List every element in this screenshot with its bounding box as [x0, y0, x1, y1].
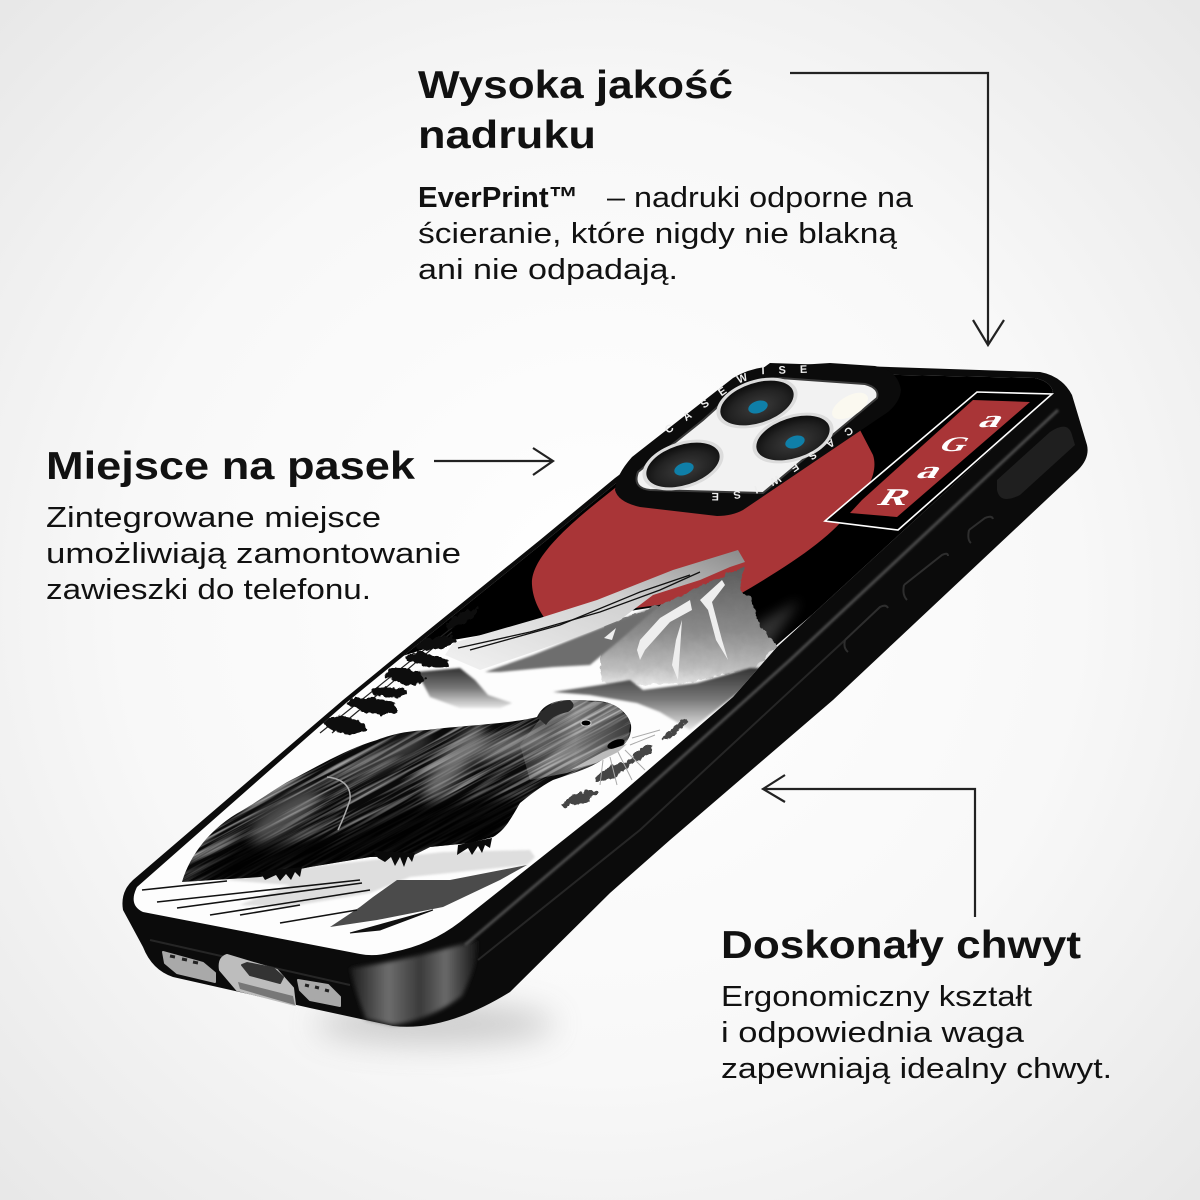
- body text: ścieranie, które nigdy nie blakną: [418, 218, 898, 250]
- heading: Miejsce na pasek: [46, 445, 415, 488]
- side highlight: [465, 410, 1058, 945]
- arrow: to strap slot: [434, 448, 553, 475]
- far hill right: [553, 668, 770, 730]
- ridge cracks: [458, 572, 700, 650]
- left hill: [417, 668, 512, 708]
- red sun: [532, 420, 874, 620]
- callout: strap slot: [46, 445, 461, 606]
- screen artwork: [134, 374, 1053, 956]
- body text: ani nie odpadają.: [418, 254, 678, 286]
- brand label: [825, 392, 1052, 530]
- ear: [538, 700, 574, 725]
- side buttons: [844, 517, 993, 652]
- white base: [134, 374, 1053, 956]
- mountain face: [600, 567, 777, 686]
- pine trees right: [559, 717, 689, 810]
- body text: zawieszki do telefonu.: [46, 574, 371, 606]
- whiskers: [600, 730, 660, 785]
- heading: Wysoka jakość: [418, 64, 733, 107]
- phone case: [122, 363, 1088, 1028]
- label outline: [825, 392, 1052, 530]
- island frame: [615, 363, 901, 516]
- lens left: [636, 430, 730, 500]
- corner shine: [350, 940, 477, 1025]
- body text: Zintegrowane miejsce: [46, 502, 381, 534]
- heading: [418, 64, 733, 157]
- body text: [418, 182, 914, 286]
- body text: zapewniają idealny chwyt.: [721, 1053, 1112, 1085]
- side grip lump: [997, 427, 1075, 499]
- haunch outline: [327, 777, 350, 830]
- rock black strokes: [142, 880, 370, 923]
- heading: nadruku: [418, 114, 596, 157]
- belly shadow: [185, 795, 530, 885]
- label glyphs: a: [973, 406, 1012, 432]
- muzzle: [570, 744, 627, 770]
- beaver head: [520, 700, 631, 780]
- flash: [828, 387, 872, 425]
- island opening: [636, 378, 878, 493]
- label glyphs: a: [911, 457, 950, 483]
- rear front paw: [457, 838, 492, 855]
- ring text lower: CASEWISE: [712, 428, 853, 500]
- label glyphs: R: [872, 484, 920, 511]
- bumper lines: [150, 640, 845, 985]
- arrow: to print surface: [790, 73, 1004, 345]
- fur strands: [182, 700, 631, 882]
- heading: Doskonały chwyt: [721, 924, 1081, 967]
- label glyphs: [872, 406, 1012, 511]
- beaver body: [182, 700, 631, 882]
- body text: EverPrint™: [418, 182, 578, 214]
- eye: [581, 720, 591, 726]
- mountain wedge: [485, 605, 660, 672]
- mountain ridge band: [445, 550, 745, 670]
- front paw: [373, 851, 415, 867]
- label glyphs: G: [933, 433, 976, 456]
- camera island: [615, 363, 901, 516]
- port: left speaker: [163, 952, 215, 982]
- label red strip: [850, 400, 1030, 517]
- hind paw: [260, 867, 302, 881]
- callout: print quality: [418, 64, 914, 286]
- beaver: [182, 700, 660, 882]
- foreground rock light: [225, 850, 535, 907]
- fur highlights: [418, 724, 492, 803]
- body text: – nadruki odporne na: [607, 182, 914, 214]
- nose: [607, 739, 625, 749]
- phone shadow: [315, 1004, 555, 1044]
- arrow: to case side: [763, 775, 975, 917]
- grey mist right of mountain: [738, 601, 798, 672]
- foreground rock dark: [330, 865, 527, 927]
- snow streaks: [604, 580, 728, 680]
- lens right: [746, 403, 840, 473]
- body text: [46, 502, 461, 606]
- body text: umożliwiają zamontowanie: [46, 538, 461, 570]
- case body: [122, 363, 1088, 1027]
- ring text upper: CASEWISE: [666, 365, 807, 432]
- callout: grip: [721, 924, 1112, 1085]
- pine trees left: [320, 605, 481, 737]
- body text: [721, 981, 1112, 1085]
- body text: i odpowiednia waga: [721, 1017, 1025, 1049]
- port: right speaker: [298, 980, 340, 1006]
- port: charging: [220, 955, 295, 1005]
- body text: Ergonomiczny kształt: [721, 981, 1032, 1013]
- black sky: [404, 374, 1053, 656]
- lens top: [710, 368, 804, 438]
